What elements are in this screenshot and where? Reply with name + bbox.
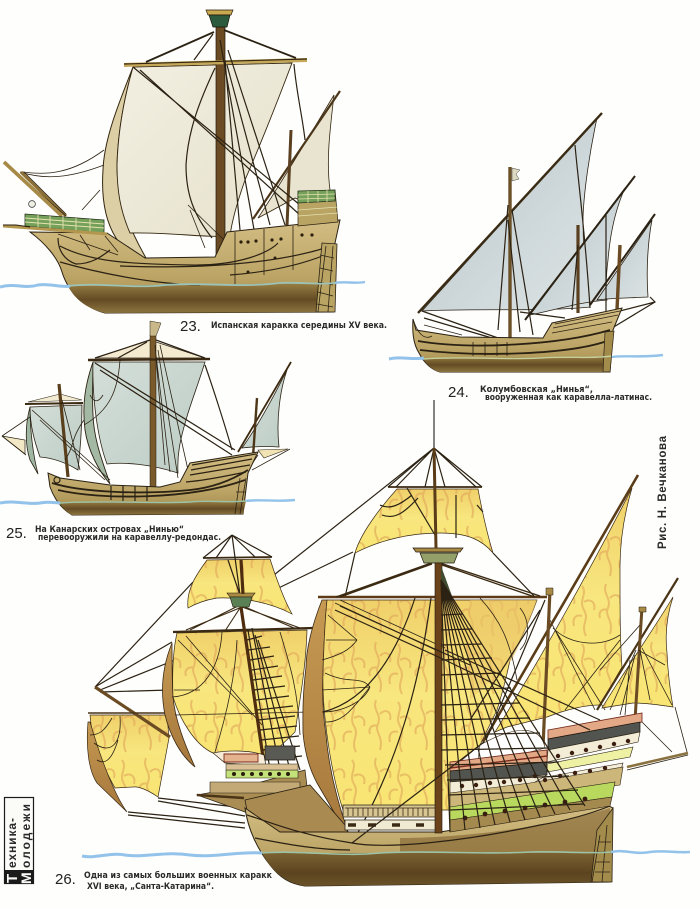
ship 25 hull bbox=[48, 452, 258, 515]
ship 25 mainsail bbox=[93, 362, 205, 473]
ship 26 main shrouds and ratlines bbox=[335, 580, 600, 843]
ship 25 mainsail flap bbox=[84, 362, 110, 484]
ship 23: Spanish carrack bbox=[0, 10, 365, 313]
caption 26: XVI века, „Санта-Катарина“. bbox=[87, 882, 214, 892]
ship 23 mainsail bbox=[117, 63, 292, 236]
ship 23 mizzen mast bbox=[287, 130, 291, 226]
caption 24: вооруженная как каравелла-латинас. bbox=[485, 393, 652, 403]
ship 26 bonaventure sail bbox=[597, 578, 687, 752]
ship 25 rigging bbox=[2, 340, 290, 480]
ship 25 water right bbox=[246, 500, 295, 501]
ship 25 topsail bunt bbox=[95, 340, 205, 358]
caption 25: На Канарских островах „Нинью“ bbox=[35, 525, 184, 535]
ship 26 upper aftcastle bbox=[530, 713, 642, 790]
ship 23 forecastle lattice bbox=[3, 201, 107, 234]
ship 26 main topsail bbox=[345, 400, 535, 597]
caption 23: 23. bbox=[180, 318, 201, 335]
caption 26: 26. bbox=[55, 871, 76, 888]
ship 23 main mast bbox=[216, 27, 225, 255]
ship 25 masts and yards bbox=[25, 321, 210, 487]
caption 26: Одна из самых больших военных каракк bbox=[84, 870, 272, 881]
ship 24 main yard bbox=[418, 113, 602, 313]
ship 26 bow hull wedge bbox=[245, 785, 352, 850]
ship 25 water left bbox=[0, 502, 60, 503]
ship 26 hull planks bbox=[247, 806, 610, 850]
caption 24: 24. bbox=[448, 384, 469, 401]
ship 25 planks and frames bbox=[52, 454, 256, 514]
ship 26 underwater hull bbox=[262, 853, 611, 886]
caption 24: Колумбовская „Нинья“, bbox=[480, 384, 593, 395]
ship 24 rudder bbox=[603, 331, 614, 372]
ship 23 mizzen yard bbox=[253, 91, 340, 219]
ship 25: redondas caravel bbox=[0, 321, 295, 515]
magazine logo: Т bbox=[4, 874, 21, 883]
ship 24 waterline bbox=[423, 356, 611, 359]
ship 23 hull planks bbox=[58, 226, 325, 285]
ship 25 waterline bbox=[60, 501, 246, 503]
magazine logo: ехника- bbox=[5, 818, 19, 868]
caption 26 bbox=[55, 870, 272, 892]
ship 25 fore sail flap bbox=[26, 407, 38, 474]
ship 23 sail bonnet curve bbox=[186, 68, 215, 238]
ship 26 water right bbox=[611, 851, 690, 853]
ship 26: Santa Catarina carrack bbox=[82, 400, 690, 886]
ship 23 crow's nest bbox=[206, 10, 233, 27]
ship 23 mizzen sail bbox=[258, 95, 337, 218]
ship 24 second yard bbox=[525, 176, 635, 320]
ship 26 fore topsail bbox=[188, 535, 292, 614]
ship 24 second lateen sail bbox=[530, 188, 625, 315]
ship 26 white gap behind rigging bbox=[478, 730, 545, 760]
ship 25 mizzen sail bbox=[242, 370, 287, 448]
ship 24 underwater hull bbox=[423, 356, 611, 372]
ship 26 waterline bbox=[262, 852, 611, 854]
ship 25 underwater hull bbox=[60, 501, 246, 515]
caption 23: Испанская каракка середины XV века. bbox=[211, 321, 387, 331]
ship 25 mizzen yard bbox=[238, 362, 291, 452]
ship 26 forecastle bbox=[197, 746, 310, 812]
ship 26 stern bumkin bbox=[627, 753, 688, 770]
ship 26 waist balustrade bbox=[343, 805, 436, 830]
magazine logo: М bbox=[18, 872, 34, 884]
caption 25: перевооружили на каравеллу-редондас. bbox=[38, 533, 221, 543]
ship 26 mainsail bbox=[322, 598, 537, 843]
ship 23 main yard bbox=[124, 60, 307, 65]
ship 24 third yard bbox=[590, 214, 655, 305]
ship 23 rigging bbox=[4, 30, 305, 248]
caption 25 bbox=[6, 525, 221, 543]
ship 26 mainsail flap bbox=[303, 600, 352, 843]
ship 23 bowsprit bbox=[4, 162, 62, 216]
ship 26 gun ports bbox=[460, 739, 630, 820]
magazine logo: олодежи bbox=[19, 804, 33, 868]
ship 24 water left bbox=[389, 358, 424, 359]
ship 26 shroud head bbox=[441, 566, 452, 596]
ship 23 mainsail flap bbox=[103, 67, 146, 258]
ship 24 third lateen sail bbox=[597, 220, 652, 300]
ship 23 gun ports bbox=[239, 233, 314, 274]
ship 25 fore sail bbox=[30, 405, 82, 470]
ship 25 mizzen mast and lower spar bbox=[253, 398, 288, 458]
ship 23 water right bbox=[335, 282, 365, 283]
ship 24 water right bbox=[612, 355, 663, 357]
ship 26 lower aftcastle bbox=[450, 750, 623, 832]
ship 26 long forestays bbox=[95, 448, 434, 828]
ship 25 fore top bunt bbox=[28, 394, 82, 402]
ship 26 fore yard and top bbox=[173, 560, 313, 764]
ship 23 rudder bbox=[316, 243, 337, 312]
ship 23 waterline bbox=[68, 283, 335, 286]
ship 26 mizzen lateen sail bbox=[483, 475, 638, 747]
ship 26 hull bbox=[245, 805, 613, 886]
ship 24 hull bbox=[413, 308, 622, 372]
ship 23 sterncastle lattice bbox=[298, 190, 338, 226]
magazine logo bbox=[4, 798, 34, 884]
ship 23 water left bbox=[0, 285, 70, 287]
caption 24 bbox=[448, 384, 652, 403]
ship 25 bow sprit sail bbox=[2, 436, 25, 454]
ship 26 water left bbox=[82, 853, 262, 857]
ship 26 main yard and top bbox=[318, 400, 547, 597]
ship 26 fore sail bbox=[172, 630, 310, 758]
ship 26 fore ratlines bbox=[247, 628, 302, 770]
ship 24 main lateen sail bbox=[422, 118, 597, 311]
ship 26 spritsail bbox=[87, 687, 170, 812]
caption 25: 25. bbox=[6, 525, 27, 542]
ship 26 main mast lower bbox=[435, 563, 442, 833]
ship 24 planks bbox=[413, 311, 620, 356]
caption 23 bbox=[180, 318, 387, 335]
ship 23 hull bbox=[30, 220, 340, 313]
ship 24 rigging bbox=[422, 145, 655, 338]
ship 26 rudder bbox=[591, 808, 613, 882]
ship 24: Nina lateen caravel bbox=[389, 113, 663, 372]
artist credit: Рис. Н. Вечканова bbox=[657, 435, 669, 549]
ship 23 underwater hull bbox=[68, 283, 333, 313]
ship 26 fore sail flap bbox=[163, 643, 195, 767]
ship 24 masts bbox=[510, 167, 620, 338]
